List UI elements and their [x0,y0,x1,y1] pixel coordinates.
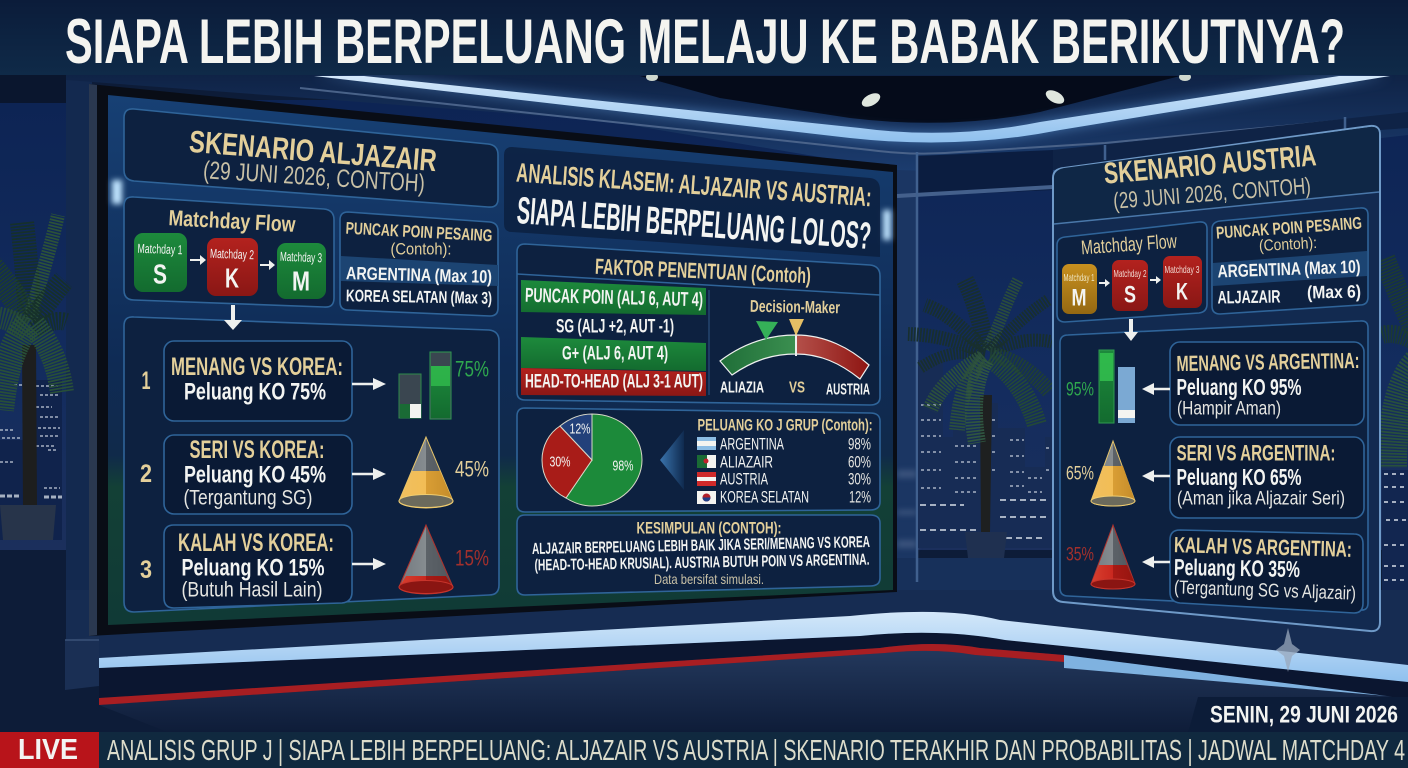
scenario 2: (Aman jika Aljazair Seri) [1177,488,1345,510]
matchday flow panel [124,197,334,307]
pie chart [542,414,642,506]
scenarios panel [124,305,499,612]
pie chart: 12% [570,420,590,438]
chip: matchday 1: Matchday 1 [137,241,183,257]
kesimpulan panel: KESIMPULAN (CONTOH): [636,518,782,538]
pie chart: 30% [550,454,570,470]
scenario 3: (Butuh Hasil Lain) [182,578,322,602]
scenario 3: (Tergantung SG vs Aljazair) [1174,577,1356,605]
scenario 1: Peluang KO 95% [1176,374,1302,400]
heading: skenario austria: (29 JUNI 2026, CONTOH) [1112,172,1312,214]
pointer triangle [660,430,684,490]
scenario 3 [1066,525,1363,613]
scenario 2: (Tergantung SG) [184,486,312,510]
panel: analisis klasem [504,147,880,595]
legend: 98% [848,434,871,454]
kesimpulan panel: Data bersifat simulasi. [654,571,764,587]
factor rows: HEAD-TO-HEAD (ALJ 3-1 AUT) [525,372,703,392]
chip: matchday 3: K [1176,278,1188,306]
live badge: LIVE [18,734,78,766]
scenario 1: 95% [1066,380,1094,400]
kesimpulan panel [517,515,880,595]
scenario 3: KALAH VS KOREA: [178,529,334,557]
chip: matchday 3: Matchday 3 [1164,264,1200,276]
chip: matchday 2 [1112,260,1148,311]
scenario 2 [140,435,489,514]
legend: 30% [848,470,871,488]
factor rows: G+ (ALJ 6, AUT 4) [562,344,668,364]
heading: skenario aljazair: SKENARIO ALJAZAIR [188,124,438,178]
chip: matchday 1: S [153,258,167,290]
chip: matchday 3: Matchday 3 [280,249,322,265]
puncak poin panel: KOREA SELATAN (Max 3) [346,286,492,308]
flag: argentina [697,437,716,450]
heading: skenario austria: SKENARIO AUSTRIA [1102,139,1318,191]
chip: matchday 3: M [292,266,310,296]
scenario 2: 2 [140,460,152,488]
scenario 1: 1 [142,367,151,395]
decision-maker gauge: VS [789,380,805,396]
decision-maker gauge [720,297,870,398]
pie chart: 98% [612,458,634,474]
scenario 2: Peluang KO 45% [184,462,326,488]
flag: korea selatan [697,491,716,504]
heading: skenario austria [1054,127,1379,224]
puncak poin panel: (Contoh): [1259,235,1317,255]
chip: matchday 1: M [1072,284,1086,312]
scenario 2: 65% [1066,464,1094,484]
legend: 60% [848,452,871,472]
ceiling light band [314,73,1390,142]
city skyline [0,360,1408,590]
center heading [504,147,880,258]
main screen [89,84,897,636]
panel: skenario austria [1053,126,1380,631]
scenario 1: 75% [455,356,489,382]
scenario 3: 3 [140,556,152,584]
scenario 3 [140,525,489,608]
panel: skenario aljazair [124,109,499,612]
decision-maker gauge: AUSTRIA [826,382,870,398]
chip: matchday 2 [207,238,258,296]
flow arrows [190,255,275,270]
down arrow [224,305,242,330]
matchday flow panel: Matchday Flow [1080,231,1178,259]
heading: skenario aljazair: (29 JUNI 2026, CONTOH) [202,156,426,198]
scenarios panel [1060,321,1368,613]
scenario 2: SERI VS KOREA: [190,436,324,464]
scenario 1: Peluang KO 75% [184,378,326,406]
center heading: SIAPA LEBIH BERPELUANG LOLOS? [515,190,873,258]
faktor penentuan panel [517,244,880,405]
factor rows: PUNCAK POIN (ALJ 6, AUT 4) [525,285,703,311]
heading: skenario aljazair [124,109,498,207]
chip: matchday 2: Matchday 2 [1114,268,1147,280]
palm tree: right [1382,258,1408,468]
chip: matchday 2: Matchday 2 [210,246,254,262]
center heading: ANALISIS KLASEM: ALJAZAIR VS AUSTRIA: [515,158,873,212]
puncak poin panel [340,212,498,316]
live badge [0,732,99,768]
flag: aljazair [697,455,716,468]
chip: matchday 3 [1163,256,1202,308]
chip: matchday 1 [1062,264,1097,314]
scenario 1 [142,341,489,421]
chip: matchday 1: Matchday 1 [1064,272,1095,284]
palm tree: centre [908,280,1052,558]
ko chance panel [517,408,880,512]
factor rows: SG (ALJ +2, AUT -1) [556,316,674,338]
flag: austria [697,472,716,486]
scenario 3: Peluang KO 35% [1174,554,1300,582]
puncak poin panel: (Contoh): [390,240,452,258]
chip: matchday 1 [134,233,187,292]
scenario 1: MENANG VS KOREA: [171,353,343,381]
scenario 1: (Hampir Aman) [1177,398,1281,420]
scenario 2: SERI VS ARGENTINA: [1176,440,1336,466]
legend: KOREA SELATAN [720,488,809,506]
puncak poin panel: (Max 6) [1307,282,1361,302]
scenario 1 [1066,342,1364,425]
decision-maker gauge: Decision-Maker [750,297,840,317]
factor rows [521,280,706,396]
legend: PELUANG KO J GRUP (Contoh): [698,416,872,434]
puncak poin panel: PUNCAK POIN PESAING [345,219,493,245]
legend: 12% [849,488,871,506]
chip: matchday 2: S [1124,282,1136,308]
puncak poin panel: ARGENTINA (Max 10) [1217,257,1361,281]
chip: matchday 3 [277,243,326,299]
legend [697,416,872,506]
scenario 3: 15% [455,546,489,570]
puncak poin panel [1212,208,1368,314]
decision-maker gauge: ALIAZIA [720,380,764,396]
matchday flow panel [1057,222,1207,322]
legend: AUSTRIA [720,470,768,488]
matchday flow panel: Matchday Flow [168,205,297,237]
scenario 3: 35% [1066,544,1094,566]
kesimpulan panel: (HEAD-TO-HEAD KRUSIAL). AUSTRIA BUTUH POIN VS ARGENTINA. [534,552,870,574]
puncak poin panel: ALJAZAIR [1217,286,1281,308]
kesimpulan panel: ALJAZAIR BERPELUANG LEBIH BAIK JIKA SERI/MENANG VS KOREA [532,534,870,558]
legend: ARGENTINA [720,434,784,454]
scenario 2 [1066,437,1364,518]
date box [1188,697,1408,733]
palm tree: left [0,215,66,540]
flow arrows [1099,276,1161,287]
puncak poin panel: ARGENTINA (Max 10) [346,263,492,287]
faktor penentuan panel: FAKTOR PENENTUAN (Contoh) [595,254,811,288]
scenario 2: Peluang KO 65% [1176,464,1302,490]
legend: ALIAZAIR [720,452,773,472]
chip: matchday 2: K [225,262,239,294]
floor light bands [65,612,1408,733]
scenario 2: 45% [455,456,489,482]
down arrow [1124,319,1138,341]
scenario 3: Peluang KO 15% [182,554,324,582]
